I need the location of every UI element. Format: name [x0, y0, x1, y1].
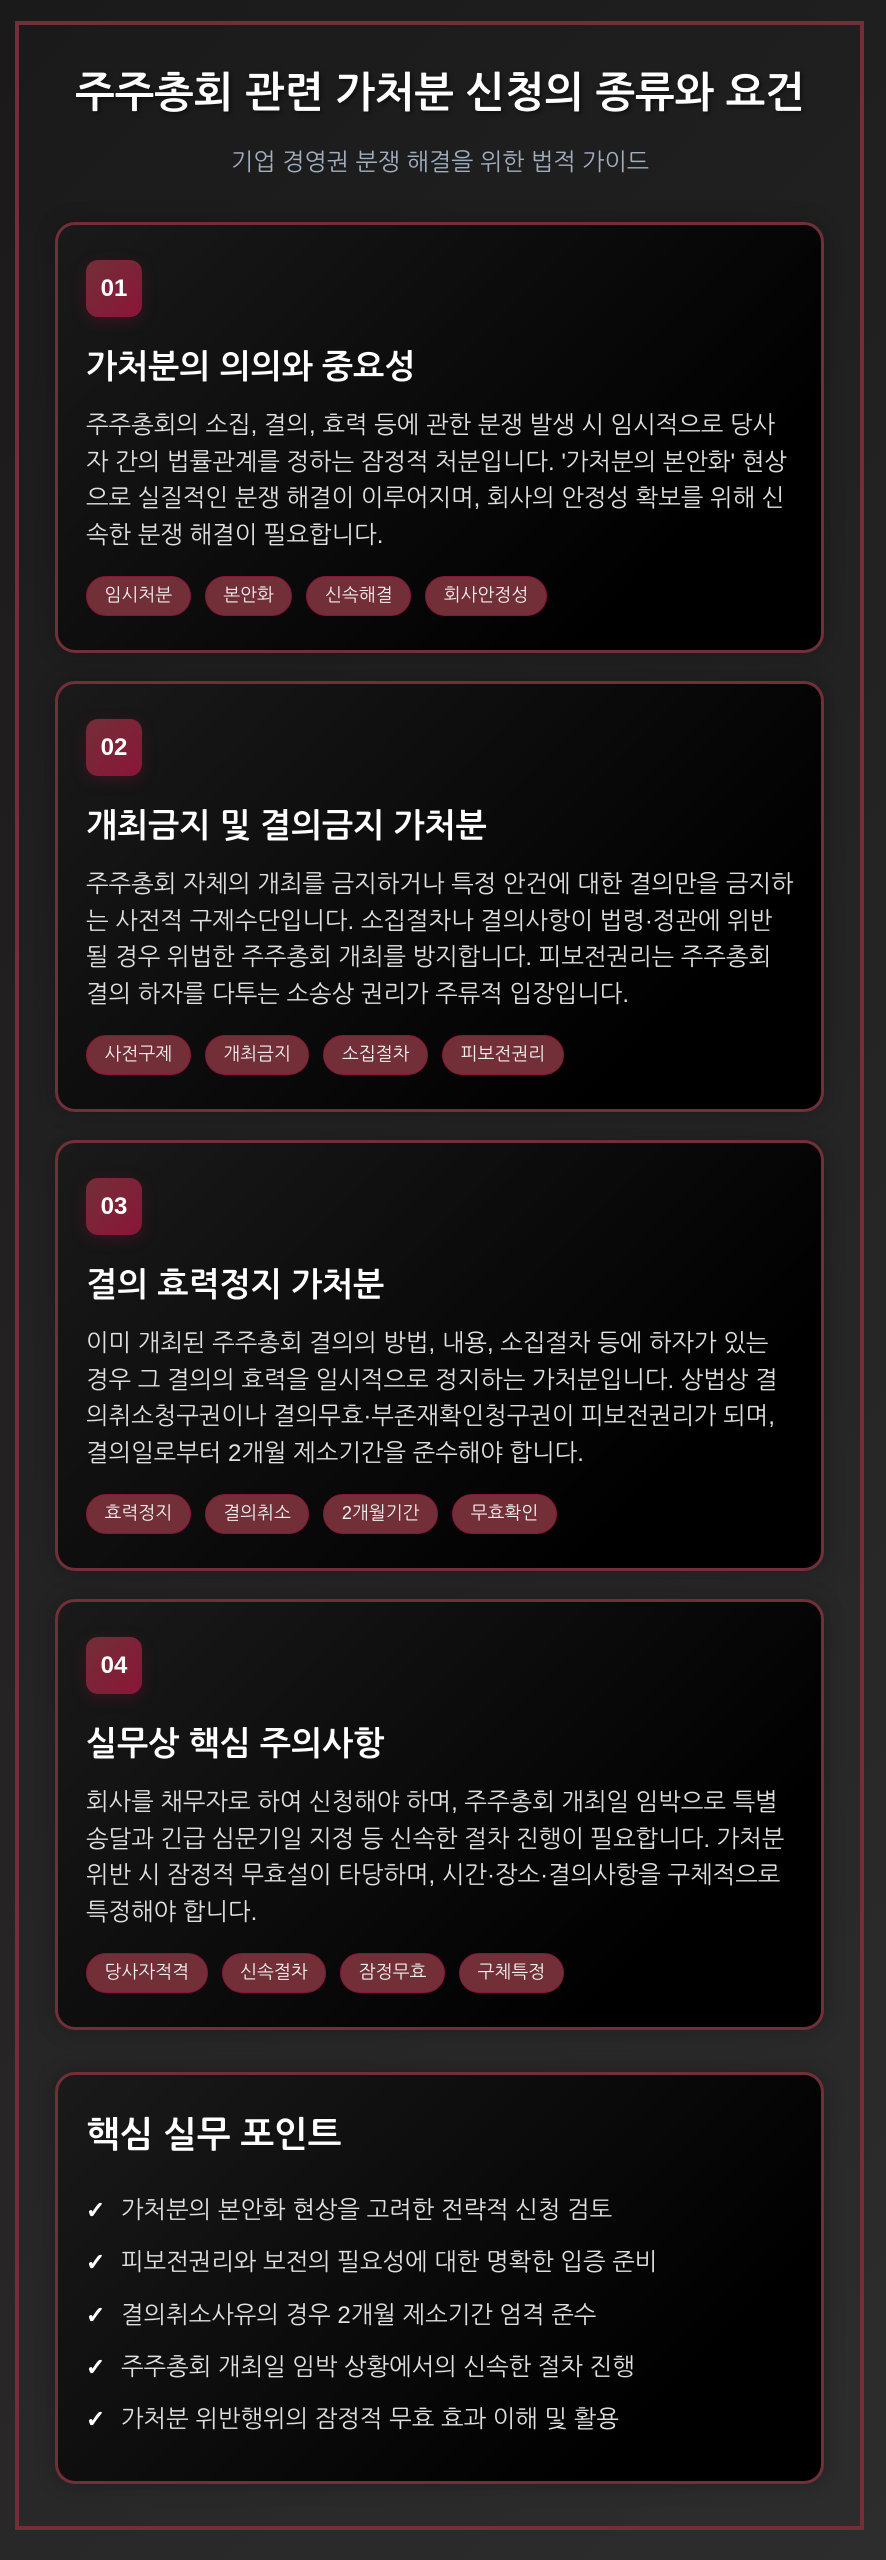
body text 04	[86, 1789, 784, 1926]
checklist item 3: ✓	[86, 2303, 105, 2329]
checklist item 3: 결의취소사유의 경우 2개월 제소기간 엄격 준수	[121, 2302, 596, 2329]
tags 01: 임시처분	[104, 585, 172, 605]
tags 02	[86, 1035, 564, 1075]
body text 02: 될 경우 위법한 주주총회 개최를 방지합니다. 피보전권리는 주주총회	[86, 944, 771, 971]
body text 01: 으로 실질적인 분쟁 해결이 이루어지며, 회사의 안정성 확보를 위해 신	[86, 485, 784, 512]
body text 02: 결의 하자를 다투는 소송상 권리가 주류적 입장입니다.	[86, 981, 629, 1008]
body text 02	[86, 871, 794, 1008]
tags 02: 사전구제	[104, 1044, 172, 1064]
tags 04: 당사자적격	[104, 1962, 189, 1982]
subtitle: 기업 경영권 분쟁 해결을 위한 법적 가이드	[231, 150, 649, 176]
tags 01: 신속해결	[325, 585, 393, 605]
panel: 02 injunction against holding	[55, 681, 824, 1112]
panel: key practical points	[55, 2072, 824, 2484]
panel: 03 suspension of resolution	[55, 1140, 824, 1571]
tags 02: 소집절차	[342, 1044, 410, 1064]
tags 03: 결의취소	[223, 1503, 291, 1523]
body text 03: 의취소청구권이나 결의무효·부존재확인청구권이 피보전권리가 되며,	[86, 1403, 775, 1430]
tags 04: 잠정무효	[359, 1962, 426, 1982]
body text 03: 이미 개최된 주주총회 결의의 방법, 내용, 소집절차 등에 하자가 있는	[86, 1330, 768, 1357]
body text 01	[86, 412, 787, 549]
tags 01: 본안화	[223, 585, 274, 605]
number badge 01: 01	[101, 275, 127, 302]
body text 02: 주주총회 자체의 개최를 금지하거나 특정 안건에 대한 결의만을 금지하	[86, 871, 794, 898]
panel: 01 significance of injunctions	[55, 222, 824, 653]
body text 03: 경우 그 결의의 효력을 일시적으로 정지하는 가처분입니다. 상법상 결	[86, 1367, 778, 1394]
checklist item 4: ✓	[86, 2355, 105, 2381]
panel: 04 practical cautions	[55, 1599, 824, 2030]
number badge 02: 02	[101, 734, 127, 761]
heading 03: 결의 효력정지 가처분	[86, 1267, 384, 1304]
tags 02: 개최금지	[223, 1044, 291, 1064]
body text 01: 속한 분쟁 해결이 필요합니다.	[86, 522, 383, 549]
checklist item 1: ✓	[86, 2198, 105, 2224]
body text 03	[86, 1330, 778, 1467]
number badge 03	[86, 1178, 142, 1235]
checklist item 4: 주주총회 개최일 임박 상황에서의 신속한 절차 진행	[121, 2354, 635, 2381]
body text 04: 송달과 긴급 심문기일 지정 등 신속한 절차 진행이 필요합니다. 가처분	[86, 1826, 784, 1853]
tags 04	[86, 1953, 564, 1993]
tags 02: 피보전권리	[461, 1044, 545, 1064]
heading 02: 개최금지 및 결의금지 가처분	[86, 808, 487, 845]
body text 01: 자 간의 법률관계를 정하는 잠정적 처분입니다. '가처분의 본안화' 현상	[86, 449, 787, 476]
tags 01	[86, 576, 547, 616]
number badge 02	[86, 719, 142, 776]
title: 주주총회 관련 가처분 신청의 종류와 요건	[75, 69, 805, 116]
body text 04: 회사를 채무자로 하여 신청해야 하며, 주주총회 개최일 임박으로 특별	[86, 1789, 778, 1816]
tags 03	[86, 1494, 557, 1534]
body text 02: 는 사전적 구제수단입니다. 소집절차나 결의사항이 법령·정관에 위반	[86, 908, 772, 935]
number badge 01	[86, 260, 142, 317]
body text 03: 결의일로부터 2개월 제소기간을 준수해야 합니다.	[86, 1440, 584, 1467]
number badge 04	[86, 1637, 142, 1694]
checklist item 5: 가처분 위반행위의 잠정적 무효 효과 이해 및 활용	[121, 2406, 619, 2433]
body text 01: 주주총회의 소집, 결의, 효력 등에 관한 분쟁 발생 시 임시적으로 당사	[86, 412, 775, 439]
tags 01: 회사안정성	[444, 585, 528, 605]
tags 04: 신속절차	[240, 1962, 308, 1982]
tags 03: 2개월기간	[342, 1503, 420, 1523]
tags 03: 효력정지	[104, 1503, 172, 1523]
tags 04: 구체특정	[477, 1962, 545, 1982]
checklist item 2: ✓	[86, 2250, 105, 2276]
body text 04: 위반 시 잠정적 무효설이 타당하며, 시간·장소·결의사항을 구체적으로	[86, 1862, 780, 1889]
body text 04: 특정해야 합니다.	[86, 1899, 257, 1926]
checklist item 2: 피보전권리와 보전의 필요성에 대한 명확한 입증 준비	[121, 2249, 657, 2276]
heading 01: 가처분의 의의와 중요성	[86, 349, 415, 386]
number badge 03: 03	[101, 1193, 127, 1220]
heading 04: 실무상 핵심 주의사항	[86, 1726, 384, 1763]
checklist item 1: 가처분의 본안화 현상을 고려한 전략적 신청 검토	[121, 2197, 612, 2224]
number badge 04: 04	[101, 1652, 127, 1679]
checklist item 5: ✓	[86, 2407, 105, 2433]
heading: key points: 핵심 실무 포인트	[86, 2115, 341, 2155]
tags 03: 무효확인	[471, 1503, 538, 1523]
